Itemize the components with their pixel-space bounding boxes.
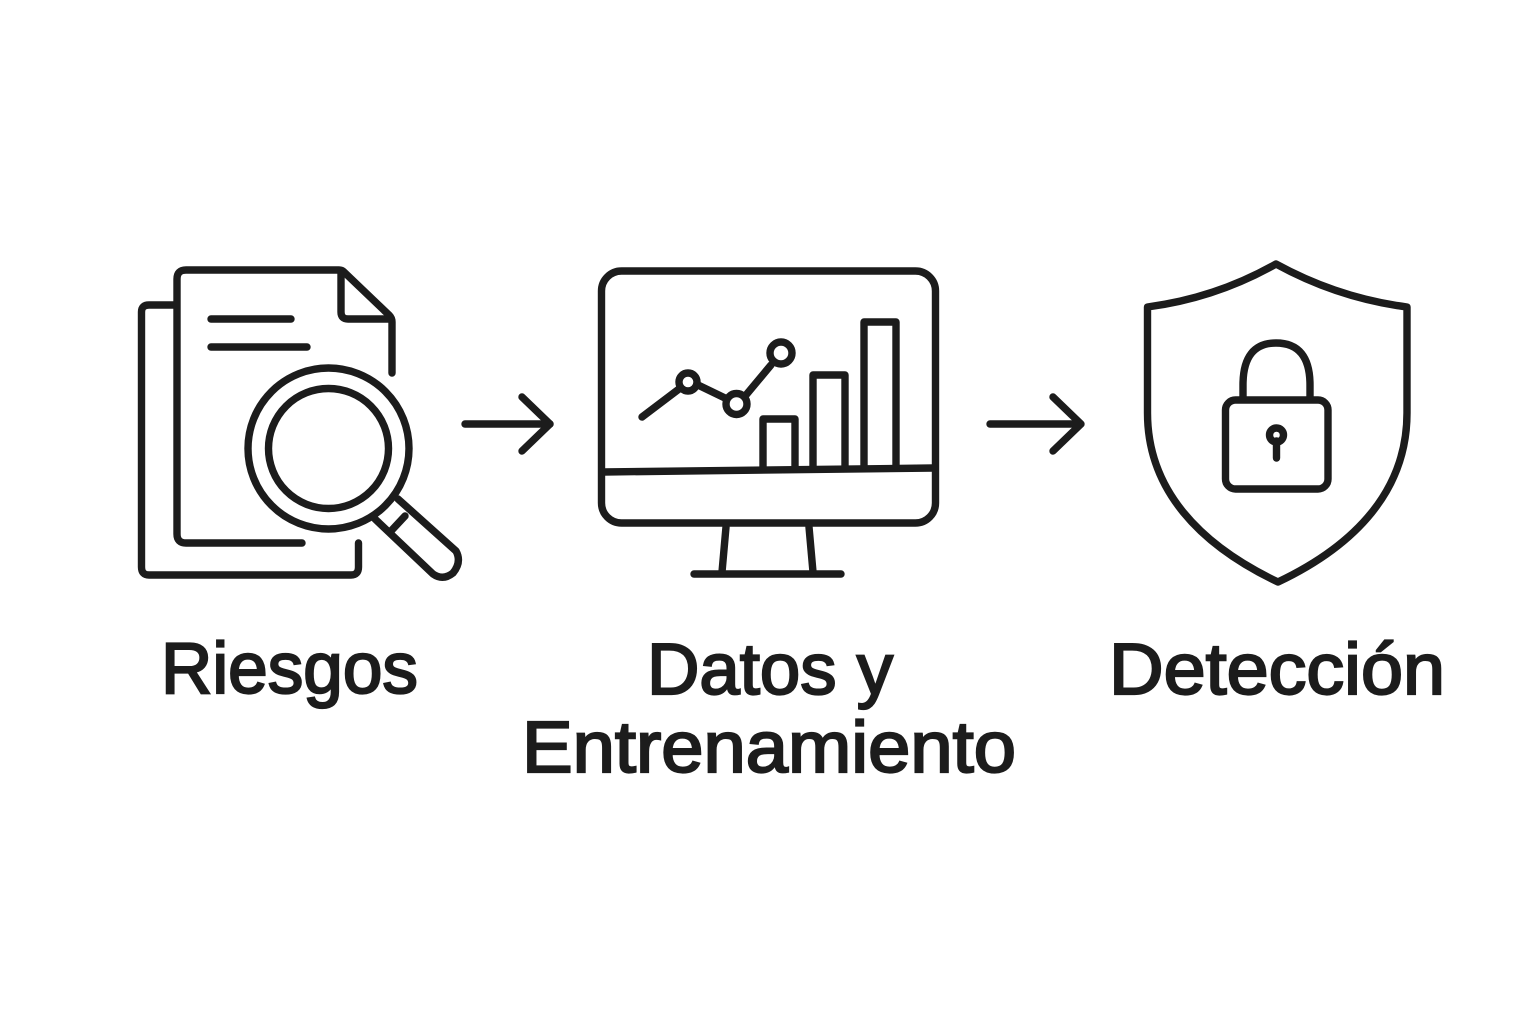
icon: monitor with chart bbox=[602, 271, 936, 574]
label: Riesgos: Riesgos bbox=[161, 629, 418, 709]
label: Datos y Entrenamiento bbox=[522, 630, 1016, 788]
label: Datos y Entrenamiento: Entrenamiento bbox=[522, 708, 1016, 788]
label: Detección: Detección bbox=[1109, 630, 1445, 710]
arrow: riesgos to datos bbox=[465, 397, 550, 451]
icon: shield with padlock bbox=[1148, 264, 1407, 582]
arrow: datos to deteccion bbox=[990, 397, 1081, 451]
label: Datos y Entrenamiento: Datos y bbox=[647, 630, 893, 710]
icon: documents with magnifying glass bbox=[142, 270, 458, 577]
